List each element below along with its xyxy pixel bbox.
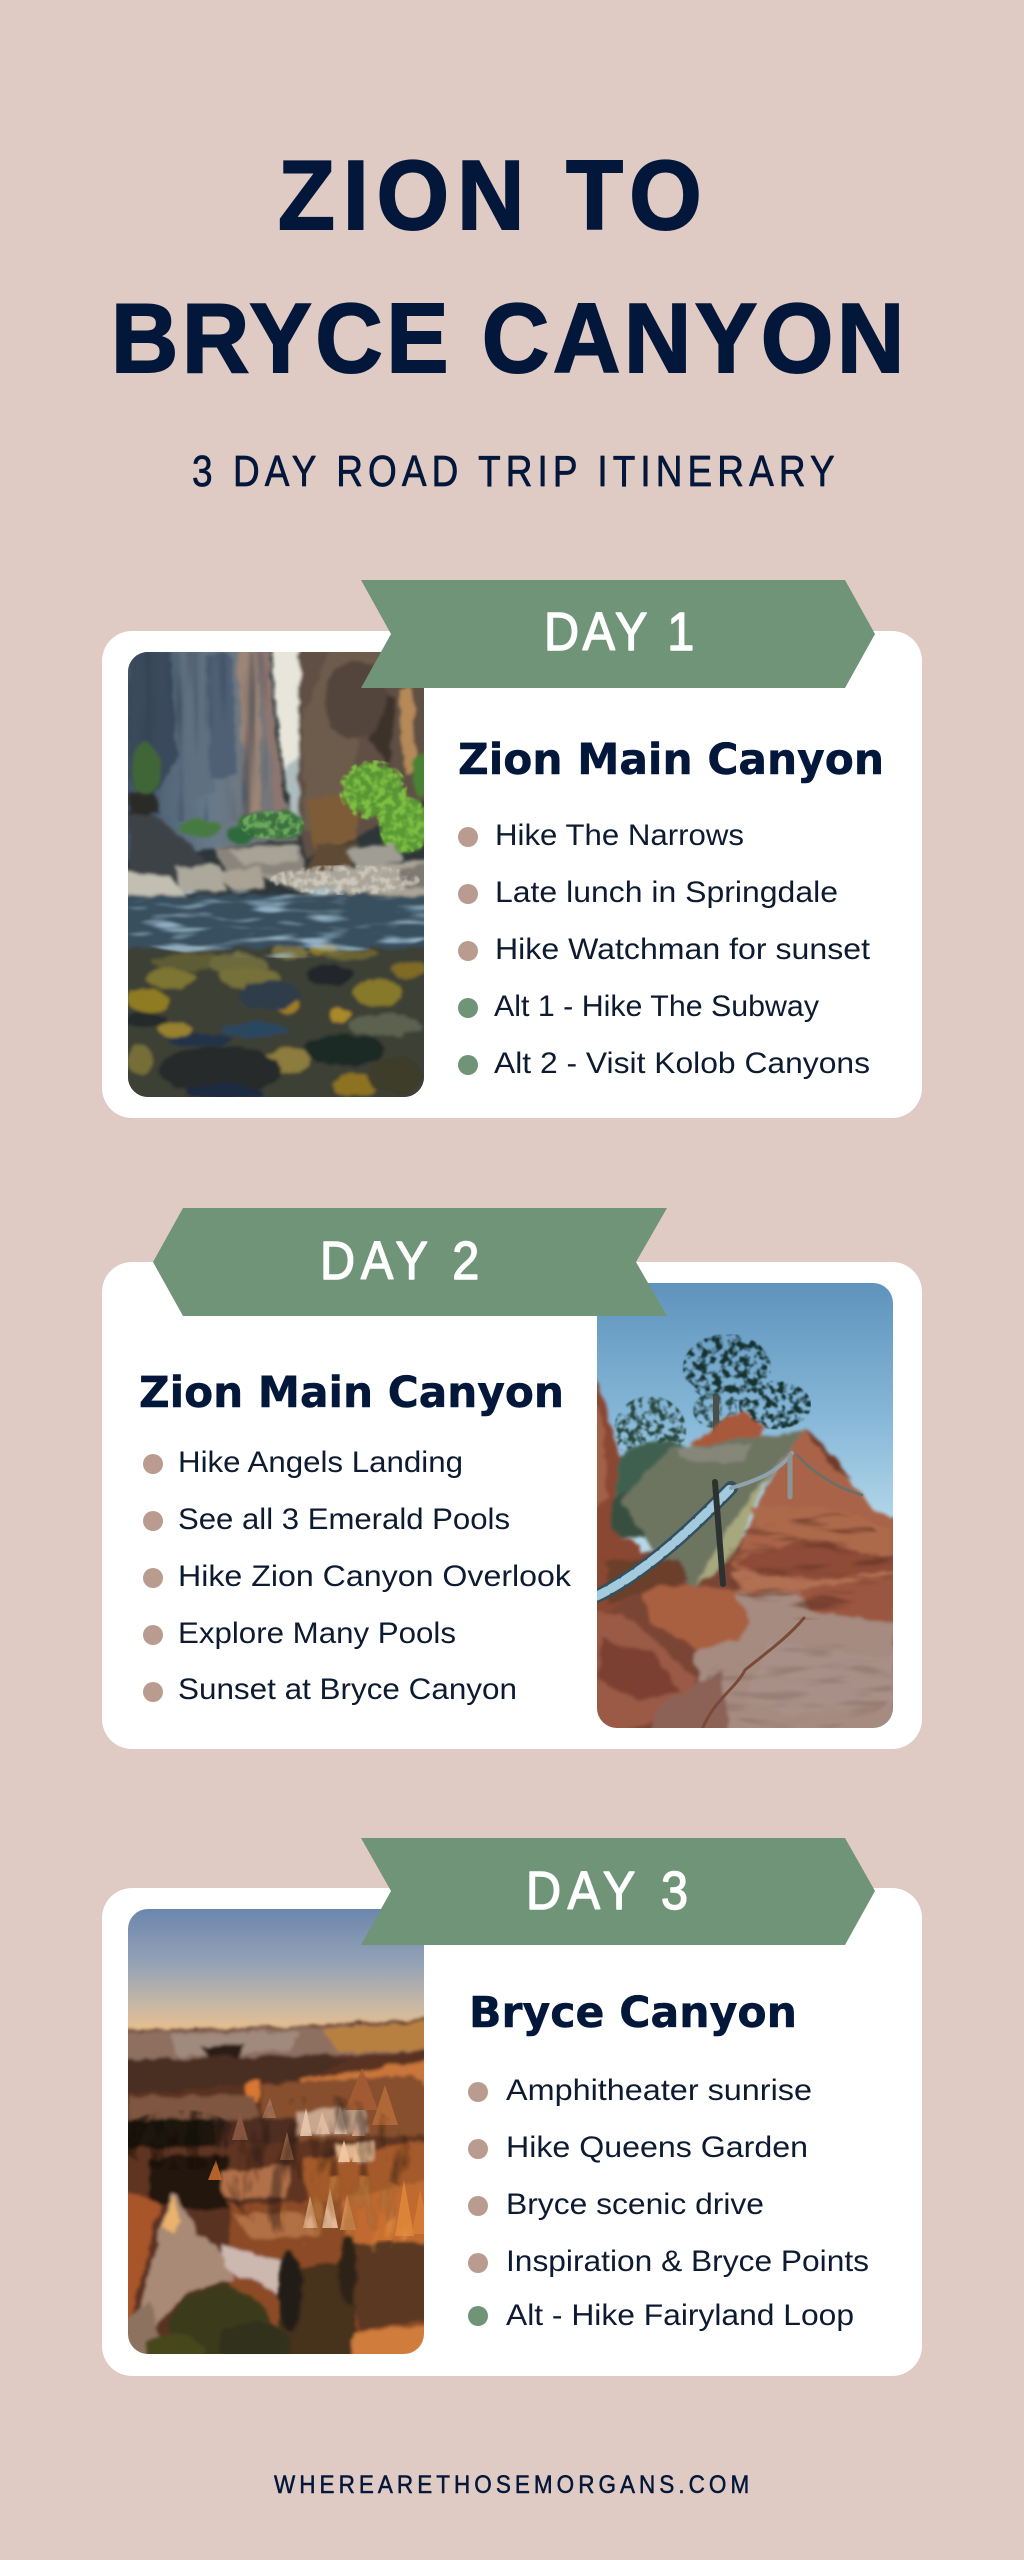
itinerary list: See all 3 Emerald Pools xyxy=(178,1503,510,1536)
footer website: WHEREARETHOSEMORGANS.COM xyxy=(274,2471,749,2499)
ribbon: day 1 xyxy=(361,580,875,688)
photo: Angels Landing xyxy=(590,1283,900,1735)
itinerary list: Hike The Narrows xyxy=(495,819,744,852)
title: BRYCE CANYON xyxy=(111,284,904,394)
ribbon label: DAY 2 xyxy=(320,1230,479,1291)
itinerary list: Hike Watchman for sunset xyxy=(495,933,871,966)
itinerary list: Inspiration & Bryce Points xyxy=(506,2245,869,2278)
card background xyxy=(102,1262,922,1749)
itinerary list xyxy=(468,2074,869,2332)
itinerary list xyxy=(143,1446,572,1706)
itinerary list: Late lunch in Springdale xyxy=(495,876,838,909)
itinerary list: Alt 2 - Visit Kolob Canyons xyxy=(494,1047,870,1080)
card heading: Bryce Canyon xyxy=(469,1988,797,2038)
photo: Bryce Amphitheater xyxy=(120,1909,430,2369)
card background xyxy=(102,631,922,1118)
card background xyxy=(102,1888,922,2376)
title: ZION TO xyxy=(278,141,702,251)
card heading: Zion Main Canyon xyxy=(458,735,884,785)
itinerary list: Sunset at Bryce Canyon xyxy=(178,1673,517,1706)
title xyxy=(111,141,904,394)
subtitle: 3 DAY ROAD TRIP ITINERARY xyxy=(192,446,835,496)
itinerary list: Explore Many Pools xyxy=(178,1617,456,1650)
photo: The Narrows xyxy=(128,652,424,1097)
itinerary list: Alt - Hike Fairyland Loop xyxy=(506,2299,854,2332)
itinerary list: Amphitheater sunrise xyxy=(506,2074,812,2107)
panel: day 3 xyxy=(102,1838,922,2376)
ribbon label: DAY 1 xyxy=(544,601,694,662)
itinerary list: Hike Queens Garden xyxy=(506,2131,808,2164)
itinerary list: Alt 1 - Hike The Subway xyxy=(494,990,819,1023)
itinerary list: Bryce scenic drive xyxy=(506,2188,764,2221)
ribbon: day 2 xyxy=(153,1208,667,1316)
panel: day 1 xyxy=(102,580,922,1118)
ribbon label: DAY 3 xyxy=(526,1860,688,1921)
itinerary list: Hike Angels Landing xyxy=(178,1446,463,1479)
ribbon: day 3 xyxy=(361,1838,875,1945)
panel: day 2 xyxy=(102,1208,922,1749)
itinerary list: Hike Zion Canyon Overlook xyxy=(178,1560,572,1593)
card heading: Zion Main Canyon xyxy=(139,1368,564,1418)
itinerary list xyxy=(458,819,871,1080)
